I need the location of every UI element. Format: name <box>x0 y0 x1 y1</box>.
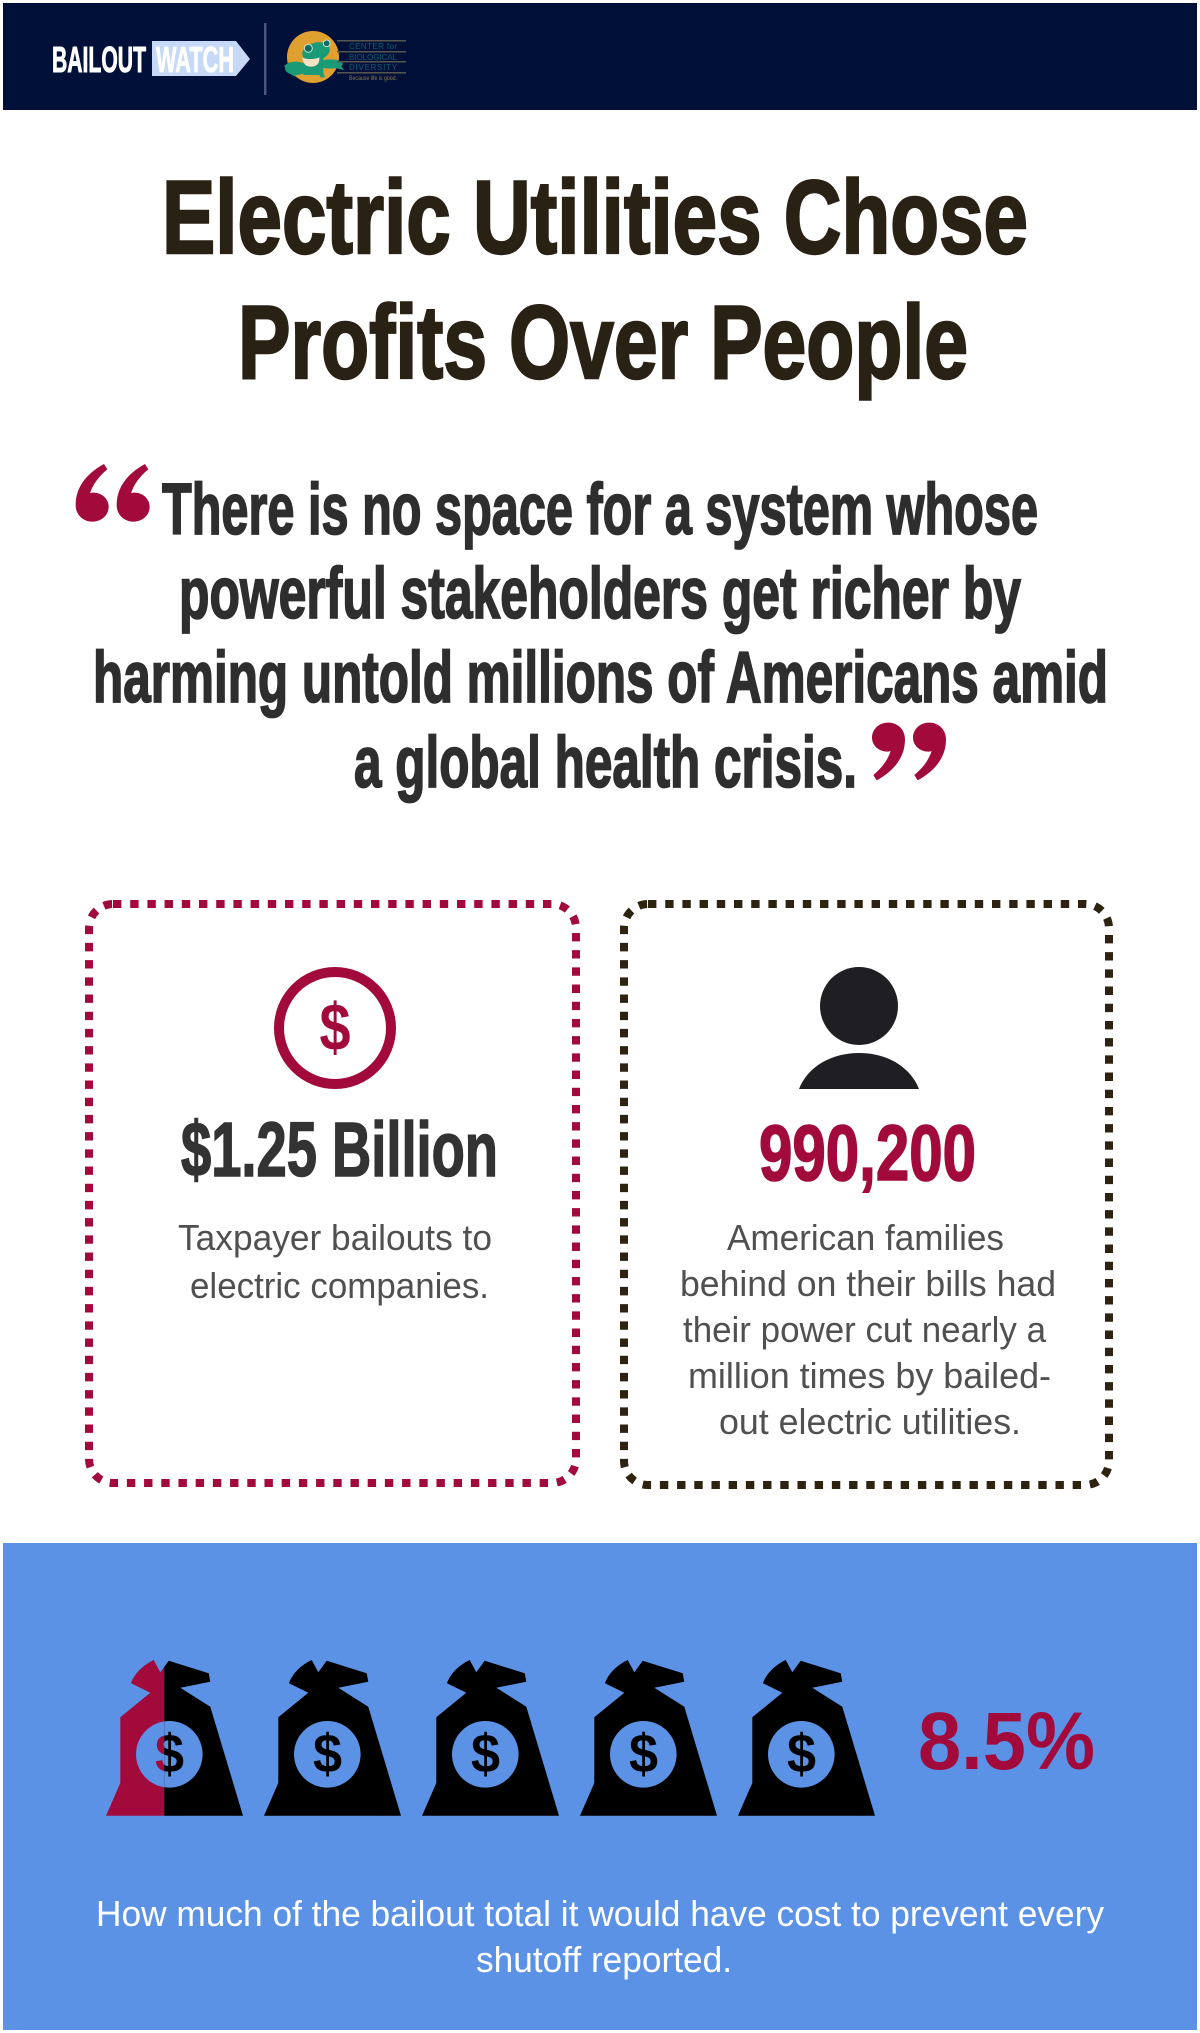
icon: person <box>799 967 919 1089</box>
money bag 3 <box>422 1660 559 1816</box>
icon: money bags <box>106 1660 875 1816</box>
text: shutoff description: their power cut nearly a <box>683 1309 1047 1350</box>
panel: taxpayer bailouts <box>89 904 576 1483</box>
text: cost description: How much of the bailout total it would have cost to prevent every <box>96 1893 1104 1934</box>
title <box>162 160 1028 401</box>
quote text <box>93 470 1108 803</box>
text: taxpayer description: Taxpayer bailouts to <box>178 1217 492 1258</box>
stat: $1.25 Billion: $1.25 Billion <box>181 1107 498 1193</box>
money bag 4 <box>580 1660 717 1816</box>
money bag 1, partly filled: $ <box>155 1722 184 1784</box>
money bag 1, partly filled: $ <box>155 1722 184 1784</box>
money bag 4: $ <box>629 1722 658 1784</box>
title: Profits Over People <box>238 285 968 401</box>
icon: opening quotation mark <box>76 464 150 522</box>
money bag 2 <box>264 1660 401 1816</box>
text: shutoff description: American families <box>727 1217 1004 1258</box>
logo: Bailout Watch: WATCH <box>156 39 234 80</box>
text: shutoff description: million times by bailed- <box>688 1355 1051 1396</box>
logo: Center for Biological Diversity: BIOLOGICAL <box>349 53 398 62</box>
text: taxpayer description <box>178 1217 492 1306</box>
logo: Bailout Watch: BAILOUT <box>52 39 146 80</box>
logo: Center for Biological Diversity <box>284 31 406 83</box>
money bag 5 <box>738 1660 875 1816</box>
icon: dollar coin <box>279 972 391 1084</box>
logo: Center for Biological Diversity: Because life is good. <box>349 76 397 82</box>
text: shutoff description: behind on their bills had <box>680 1263 1056 1304</box>
panel: power shutoffs <box>624 904 1109 1485</box>
text: cost description <box>96 1893 1104 1980</box>
money bag 5: $ <box>787 1722 816 1784</box>
quote <box>76 464 1108 803</box>
money bag 3: $ <box>471 1722 500 1784</box>
text: shutoff description <box>680 1217 1056 1442</box>
logo: Center for Biological Diversity: CENTER for <box>349 42 397 51</box>
text: taxpayer description: electric companies. <box>190 1265 489 1306</box>
text: cost description: shutoff reported. <box>476 1939 732 1980</box>
stat: 990,200: 990,200 <box>759 1108 976 1197</box>
money bag 2: $ <box>313 1722 342 1784</box>
logo: Center for Biological Diversity: DIVERSITY <box>349 63 398 72</box>
icon: closing quotation mark <box>872 723 946 780</box>
money bag 1, partly filled <box>106 1660 243 1816</box>
icon: dollar coin: $ <box>320 990 350 1065</box>
panel: cost to prevent shutoffs <box>3 1543 1197 2030</box>
quote text: a global health crisis. <box>354 723 857 803</box>
stat: 8.5%: 8.5% <box>918 1696 1095 1787</box>
text: shutoff description: out electric utilities. <box>719 1401 1021 1442</box>
header band <box>3 3 1197 110</box>
